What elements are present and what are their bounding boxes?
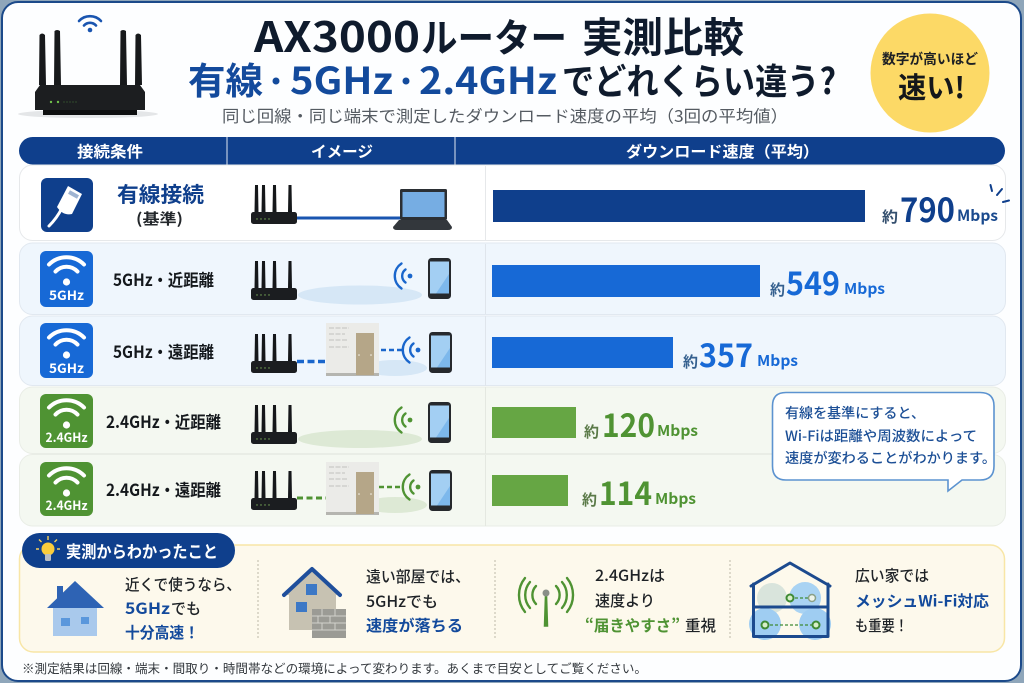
finding 1: でも — [171, 597, 201, 619]
icon: 2.4GHz wifi — [40, 394, 93, 448]
value: 120: Mbps — [657, 420, 698, 441]
subtitle heading: 5GHz — [290, 51, 393, 105]
subtitle heading — [188, 51, 836, 105]
finding 3 — [519, 564, 716, 636]
panel heading: findings — [22, 533, 235, 568]
icon: 5GHz wifi: 5GHz — [49, 358, 84, 377]
icon: 2.4GHz wifi — [40, 462, 93, 516]
description: 同じ回線・同じ端末で測定したダウンロード速度の平均（3回の平均値） — [222, 103, 788, 127]
finding 3: 速度より — [595, 589, 655, 611]
finding 2: 5GHzでも — [366, 590, 438, 612]
icon: 2.4GHz wifi: 2.4GHz — [46, 427, 88, 446]
row: 2.4GHz far: 2.4GHz・遠距離 — [106, 477, 221, 501]
table header: ダウンロード速度（平均） — [626, 140, 819, 162]
row: 5GHz far — [20, 316, 1006, 386]
value: 120 — [584, 401, 698, 447]
value: 114: 114 — [599, 469, 652, 515]
router, wall and phone illustration — [251, 462, 452, 515]
finding 3: 重視 — [685, 614, 716, 636]
icon: mesh house — [749, 563, 831, 640]
badge: faster: 数字が高いほど — [882, 49, 978, 69]
finding 4: も重要！ — [855, 614, 908, 636]
subtitle heading: 2.4GHz — [419, 51, 557, 105]
finding 2: 速度が落ちる — [366, 614, 463, 636]
finding 4 — [749, 563, 989, 640]
bar: 549 — [492, 265, 760, 297]
callout: Wi-Fiは距離や周波数によって — [785, 426, 977, 446]
row: wired: 有線接続 — [117, 179, 204, 209]
row: wired — [20, 165, 1009, 240]
panel heading: findings: 実測からわかったこと — [66, 538, 218, 562]
router and laptop illustration — [251, 185, 452, 230]
finding 4: メッシュWi-Fi対応 — [855, 590, 989, 612]
title: ルーター — [421, 8, 567, 64]
icon: 2.4GHz wifi: 2.4GHz — [46, 495, 88, 514]
bar: 357 — [492, 337, 673, 368]
value: 549: 549 — [786, 259, 840, 305]
value: 114: Mbps — [655, 488, 696, 509]
router, wall and phone illustration — [251, 323, 452, 376]
icon: house — [47, 581, 104, 636]
title: 実測比較 — [582, 4, 744, 64]
badge: faster: 速い! — [898, 65, 965, 107]
icon: house with wall — [284, 569, 346, 638]
router to phone illustration — [251, 258, 451, 304]
value: 357: Mbps — [757, 350, 798, 371]
value: 549 — [770, 259, 885, 305]
value: 120: 約 — [584, 421, 599, 442]
value: 790: 790 — [900, 184, 955, 232]
router to phone illustration — [251, 402, 451, 448]
row: 5GHz near: 5GHz・近距離 — [113, 267, 214, 291]
table header: イメージ — [311, 140, 373, 162]
value: 549: Mbps — [844, 278, 885, 299]
finding 1 — [47, 573, 241, 643]
icon: ethernet cable — [41, 178, 93, 232]
row: wired: (基準) — [136, 208, 183, 229]
finding 4: 広い家では — [855, 564, 929, 586]
bar: 120 — [492, 407, 576, 438]
table header — [19, 137, 1005, 164]
value: 790: 約 — [882, 206, 898, 227]
icon: light bulb — [36, 536, 60, 561]
value: 114: 約 — [582, 489, 597, 510]
finding 2: 遠い部屋では、 — [366, 565, 470, 587]
finding 1: 5GHz — [125, 597, 170, 619]
finding 1: 近くで使うなら、 — [125, 573, 241, 595]
bar: 114 — [492, 475, 568, 506]
callout: 速度が変わることがわかります。 — [785, 448, 996, 468]
finding 1: 十分高速！ — [125, 621, 199, 643]
value: 357: 357 — [699, 331, 753, 377]
value: 357: 約 — [683, 351, 698, 372]
finding 3: “届きやすさ” — [585, 614, 680, 636]
callout: 有線を基準にすると、 — [785, 403, 925, 423]
icon: 5GHz wifi: 5GHz — [49, 285, 84, 304]
title: AX3000 — [253, 4, 420, 65]
row: 2.4GHz near: 2.4GHz・近距離 — [106, 409, 221, 433]
icon: speed sparks — [990, 185, 1009, 202]
router illustration — [18, 16, 158, 118]
value: 114 — [582, 469, 696, 515]
value: 357 — [683, 331, 798, 377]
row: 2.4GHz far — [20, 454, 1006, 526]
callout — [772, 392, 996, 491]
bar: 790 — [493, 190, 865, 222]
subtitle heading: 有線 — [188, 51, 263, 105]
badge: faster — [870, 14, 990, 132]
icon: antenna — [519, 578, 573, 626]
finding 2 — [284, 565, 470, 638]
subtitle heading: でどれくらい違う? — [562, 53, 836, 105]
value: 120: 120 — [602, 401, 655, 447]
row: 5GHz far: 5GHz・遠距離 — [113, 339, 214, 363]
value: 549: 約 — [770, 279, 785, 300]
footnote: ※測定結果は回線・端末・間取り・時間帯などの環境によって変わります。あくまで目安としてご覧ください。 — [22, 658, 647, 677]
value: 790 — [882, 184, 998, 232]
panel: findings — [20, 533, 1004, 652]
row: 5GHz near — [20, 243, 1006, 314]
icon: 5GHz wifi — [40, 323, 93, 378]
value: 790: Mbps — [957, 204, 998, 226]
row: 2.4GHz near — [20, 387, 1006, 454]
icon: 5GHz wifi — [40, 251, 93, 307]
table header: 接続条件 — [77, 140, 143, 162]
finding 3: 2.4GHzは — [595, 564, 665, 586]
title — [253, 4, 744, 65]
